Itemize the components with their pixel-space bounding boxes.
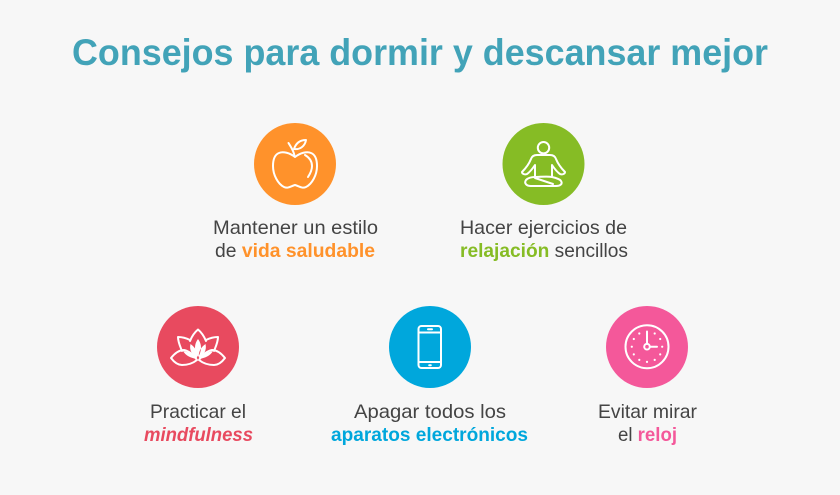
text: avoid watching the clock: el reloj	[618, 424, 677, 446]
text: relaxation: Hacer ejercicios de	[460, 217, 627, 239]
text: mindfulness: Practicar el	[150, 401, 246, 423]
title: Consejos para dormir y descansar mejor	[72, 32, 768, 73]
text: avoid watching the clock: Evitar mirar	[598, 401, 698, 423]
text: mindfulness: mindfulness	[144, 424, 253, 446]
text: healthy lifestyle: de vida saludable	[215, 240, 375, 262]
panel: relaxation	[460, 123, 628, 262]
icon: apple	[254, 123, 336, 205]
icon: smartphone	[389, 306, 471, 388]
text: relaxation: relajación sencillos	[460, 240, 628, 262]
text: avoid watching the clock	[598, 401, 698, 446]
text: healthy lifestyle: Mantener un estilo	[213, 217, 378, 239]
text: turn off devices	[331, 401, 528, 446]
panel: avoid watching the clock	[598, 306, 698, 446]
text: turn off devices: Apagar todos los	[354, 401, 506, 423]
text: mindfulness	[144, 401, 253, 446]
text: turn off devices: aparatos electrónicos	[331, 424, 528, 446]
icon: clock	[606, 306, 688, 388]
panel: mindfulness	[144, 306, 253, 446]
icon: meditating person	[502, 123, 584, 205]
text: healthy lifestyle	[213, 217, 378, 262]
icon: lotus	[157, 306, 239, 388]
panel: turn off devices	[331, 306, 528, 446]
panel: healthy lifestyle	[213, 123, 378, 262]
text: relaxation	[460, 217, 628, 262]
